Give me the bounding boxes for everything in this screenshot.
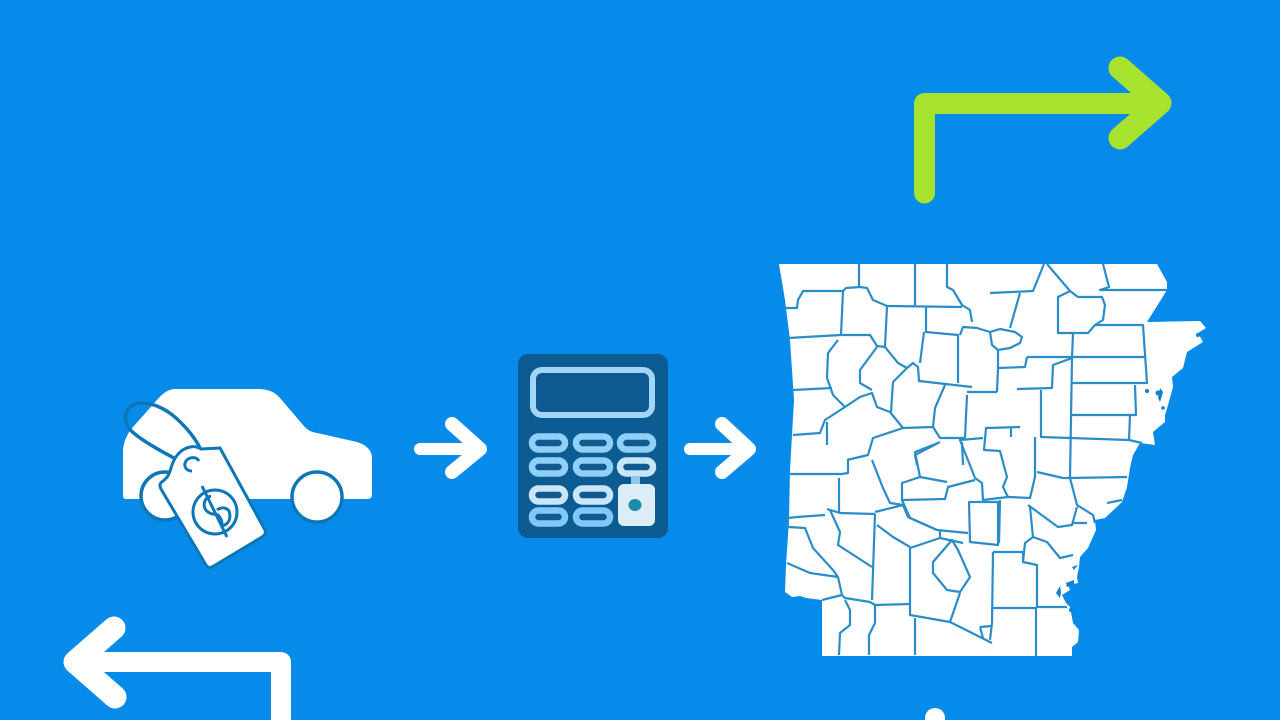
arrow: white arrow from calculator to map — [690, 424, 749, 472]
arrow: white bent arrow pointing left — [75, 628, 281, 720]
map: Arkansas counties — [779, 264, 1206, 656]
calculator large key — [618, 477, 655, 526]
price tag string — [126, 403, 200, 458]
dollar symbol on tag — [193, 486, 237, 537]
icon: car with price tag — [123, 389, 372, 567]
coastline inlets — [1056, 333, 1200, 612]
car body — [123, 389, 372, 499]
price tag hole — [185, 458, 199, 471]
calculator screen — [533, 370, 652, 415]
calculator body — [518, 354, 668, 538]
price tag — [160, 447, 265, 567]
icon: calculator — [518, 354, 668, 538]
state outline — [779, 264, 1206, 656]
calculator buttons — [532, 436, 653, 524]
icon: white dot at bottom edge — [925, 708, 945, 720]
arrow: white arrow from car to calculator — [420, 424, 480, 472]
arrow: green bent arrow pointing right — [924, 68, 1160, 193]
car rear wheel — [292, 472, 342, 522]
county boundaries — [785, 264, 1167, 656]
car front wheel — [141, 472, 189, 520]
